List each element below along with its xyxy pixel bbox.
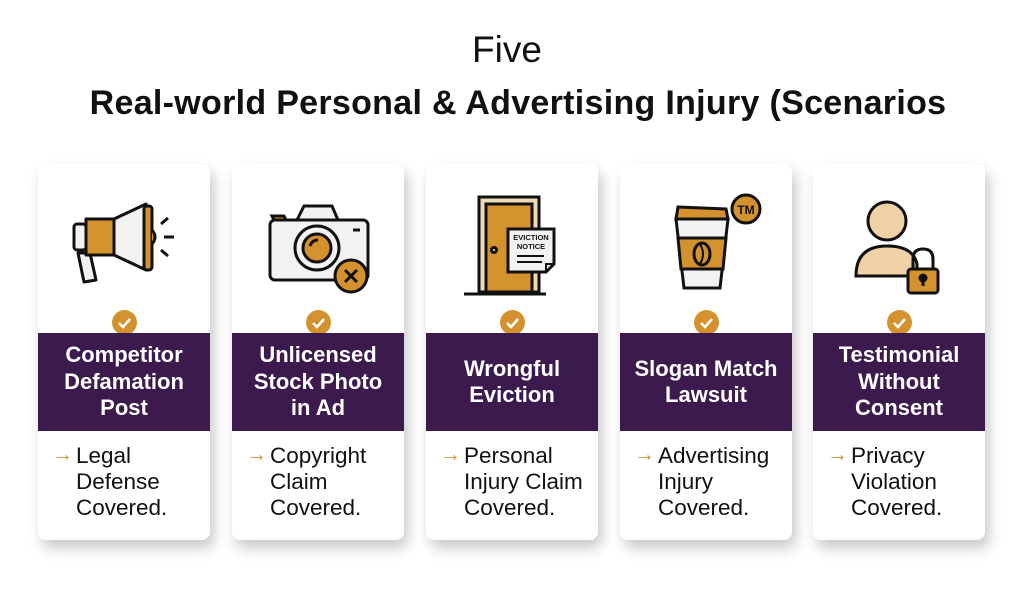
text: outcome — [440, 443, 583, 520]
heading band: Consent — [855, 395, 943, 420]
heading band — [813, 333, 985, 431]
heading band: Without — [858, 369, 940, 394]
heading band — [620, 333, 792, 431]
text: outcome — [52, 443, 167, 520]
panel: competitor defamation: Defense — [76, 469, 160, 494]
panel: competitor defamation: Covered. — [76, 495, 167, 520]
panel: testimonial without consent: → — [827, 443, 848, 466]
icon: camera — [268, 204, 370, 294]
panel: wrongful eviction: Covered. — [464, 495, 555, 520]
heading band: Stock Photo — [254, 369, 382, 394]
icon: coffee cup trademark — [674, 194, 762, 290]
title: Five: Five — [472, 29, 542, 70]
heading band: Defamation — [64, 369, 184, 394]
heading band: Competitor — [65, 342, 183, 367]
panel: unlicensed stock photo — [232, 164, 404, 540]
text: outcome — [634, 443, 769, 520]
icon: person with lock — [854, 200, 940, 294]
panel: unlicensed stock photo: Covered. — [270, 495, 361, 520]
icon: check — [887, 310, 912, 335]
icon: check — [500, 310, 525, 335]
panel: slogan match lawsuit: Covered. — [658, 495, 749, 520]
icon: check — [306, 310, 331, 335]
subtitle heading: Real-world Personal & Advertising Injury (Scenarios — [90, 84, 946, 122]
panel: slogan match lawsuit: Injury — [658, 469, 713, 494]
heading band: Lawsuit — [665, 382, 747, 407]
icon: door with eviction notice: EVICTION — [513, 233, 549, 242]
panel: testimonial without consent: Privacy — [851, 443, 925, 468]
icon: coffee cup trademark: TM — [737, 203, 755, 217]
heading band: Testimonial — [839, 342, 959, 367]
panel: wrongful eviction: → — [440, 443, 461, 466]
heading band — [232, 333, 404, 431]
panel: unlicensed stock photo: Claim — [270, 469, 328, 494]
icon: door with eviction notice — [464, 196, 556, 296]
icon: door with eviction notice: NOTICE — [517, 242, 545, 251]
panel: testimonial without consent: Covered. — [851, 495, 942, 520]
panel: competitor defamation: → — [52, 443, 73, 466]
panel: unlicensed stock photo: Copyright — [270, 443, 366, 468]
panel: slogan match lawsuit: Advertising — [658, 443, 769, 468]
panel: wrongful eviction: Injury Claim — [464, 469, 583, 494]
panel: unlicensed stock photo: → — [246, 443, 267, 466]
panel: testimonial without consent — [813, 164, 985, 540]
text: outcome — [827, 443, 942, 520]
heading band — [38, 333, 210, 431]
panel: slogan match lawsuit — [620, 164, 792, 540]
panel: slogan match lawsuit: → — [634, 443, 655, 466]
panel: wrongful eviction: Personal — [464, 443, 553, 468]
icon: check — [694, 310, 719, 335]
panel: competitor defamation — [38, 164, 210, 540]
heading band: in Ad — [291, 395, 345, 420]
icon: megaphone — [72, 202, 174, 284]
panel: wrongful eviction — [426, 164, 598, 540]
heading band: Slogan Match — [634, 356, 778, 380]
heading band: Eviction — [469, 382, 555, 407]
icon: check — [112, 310, 137, 335]
panel: testimonial without consent: Violation — [851, 469, 937, 494]
heading band — [426, 333, 598, 431]
heading band: Unlicensed — [259, 342, 377, 367]
text: outcome — [246, 443, 366, 520]
heading band: Wrongful — [464, 356, 560, 380]
heading band: Post — [100, 395, 148, 420]
panel: competitor defamation: Legal — [76, 443, 131, 468]
